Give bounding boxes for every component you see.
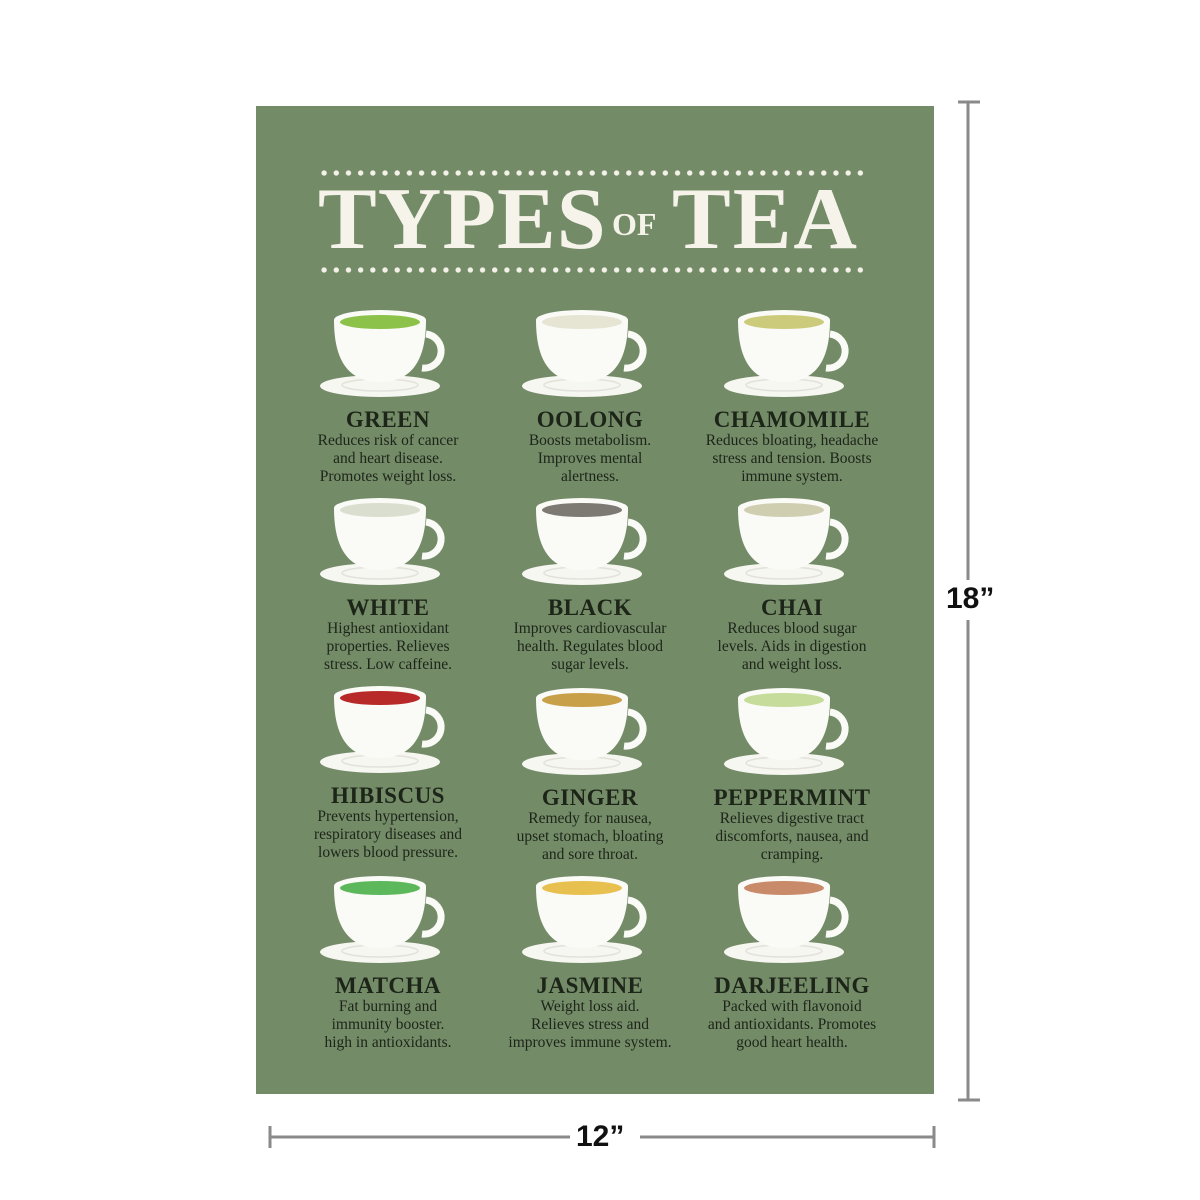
cell: white: Highest antioxidant <box>327 620 449 637</box>
cell: hibiscus: Prevents hypertension, <box>317 808 459 825</box>
cell: peppermint: PEPPERMINT <box>713 785 871 810</box>
cell: ginger <box>516 688 664 863</box>
cell: jasmine: Relieves stress and <box>531 1016 649 1033</box>
cell: chamomile: CHAMOMILE <box>714 407 870 432</box>
cell: hibiscus <box>314 686 462 861</box>
cell: matcha: immunity booster. <box>332 1016 444 1033</box>
cell: hibiscus: HIBISCUS <box>331 783 445 808</box>
cell: darjeeling: Packed with flavonoid <box>722 998 862 1015</box>
cell: hibiscus: respiratory diseases and <box>314 826 462 843</box>
cell: darjeeling: and antioxidants. Promotes <box>708 1016 876 1033</box>
title: TEA <box>672 171 859 268</box>
cell: oolong: alertness. <box>561 468 619 485</box>
dimension: height 18 inches <box>946 100 994 1102</box>
cell: jasmine: JASMINE <box>536 973 644 998</box>
panel: poster background <box>256 106 934 1094</box>
cell: peppermint: Relieves digestive tract <box>720 810 864 827</box>
cell: darjeeling: good heart health. <box>736 1034 848 1051</box>
cell: darjeeling: DARJEELING <box>714 973 870 998</box>
cell: oolong: Boosts metabolism. <box>529 432 651 449</box>
cell: green <box>318 310 458 485</box>
cell: oolong: OOLONG <box>537 407 643 432</box>
cell: green: Reduces risk of cancer <box>318 432 458 449</box>
title: TYPES <box>318 171 607 268</box>
cell: white: WHITE <box>346 595 430 620</box>
dimension: height 18 inches: 18” <box>946 582 994 615</box>
cell: black: BLACK <box>548 595 632 620</box>
cell: matcha: Fat burning and <box>339 998 437 1015</box>
cell: chai: levels. Aids in digestion <box>718 638 866 655</box>
cell: matcha <box>320 876 452 1051</box>
cell: oolong: Improves mental <box>538 450 642 467</box>
cell: peppermint: cramping. <box>761 846 823 863</box>
cell: chai: Reduces blood sugar <box>727 620 857 637</box>
dimension: width 12 inches: 12” <box>576 1120 624 1153</box>
cell: green: Promotes weight loss. <box>320 468 456 485</box>
cell: ginger: upset stomach, bloating <box>517 828 663 845</box>
cell: chai <box>718 498 866 673</box>
cell: matcha: MATCHA <box>335 973 441 998</box>
title: OF <box>612 206 656 242</box>
cell: jasmine: improves immune system. <box>508 1034 672 1051</box>
cell: chamomile <box>706 310 878 485</box>
cell: hibiscus: lowers blood pressure. <box>318 844 458 861</box>
cell: peppermint <box>713 688 871 863</box>
cell: jasmine: Weight loss aid. <box>540 998 640 1015</box>
dimension: width 12 inches <box>268 1120 936 1153</box>
decorative dot row top <box>318 169 866 177</box>
cell: black: health. Regulates blood <box>517 638 663 655</box>
cell: chai: CHAI <box>761 595 823 620</box>
cell: oolong <box>522 310 651 485</box>
cell: chamomile: Reduces bloating, headache <box>706 432 878 449</box>
cell: chamomile: immune system. <box>741 468 843 485</box>
cell: black: sugar levels. <box>551 656 629 673</box>
cell: black: Improves cardiovascular <box>514 620 666 637</box>
cell: black <box>514 498 666 673</box>
title <box>318 171 859 268</box>
decorative dot row bottom <box>318 266 866 274</box>
cell: green: GREEN <box>346 407 430 432</box>
cell: matcha: high in antioxidants. <box>324 1034 452 1051</box>
cell: ginger: GINGER <box>542 785 638 810</box>
cell: darjeeling <box>708 876 876 1051</box>
cell: ginger: Remedy for nausea, <box>528 810 652 827</box>
cell: ginger: and sore throat. <box>542 846 638 863</box>
cell: white: properties. Relieves <box>326 638 450 655</box>
cell: peppermint: discomforts, nausea, and <box>715 828 869 845</box>
cell: white <box>320 498 452 673</box>
cell: green: and heart disease. <box>333 450 443 467</box>
cell: chai: and weight loss. <box>742 656 842 673</box>
cell: white: stress. Low caffeine. <box>324 656 452 673</box>
cell: chamomile: stress and tension. Boosts <box>712 450 872 467</box>
cell: jasmine <box>508 876 672 1051</box>
